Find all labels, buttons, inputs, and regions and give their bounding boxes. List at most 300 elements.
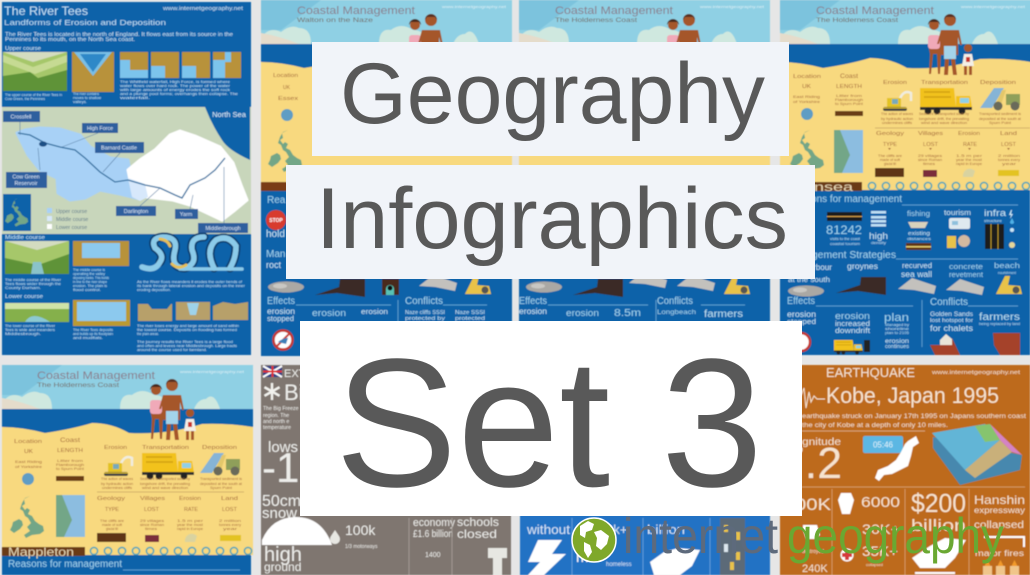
river title: The River Tees <box>4 4 88 18</box>
effects: plan to 2105 <box>885 331 909 335</box>
panel: Big Freeze extreme weather: EXTREME <box>284 368 337 380</box>
sand information graphics: Location <box>793 74 821 80</box>
sand information graphics: 2 million <box>219 519 241 523</box>
icon: no erosion sign <box>274 330 292 350</box>
river introduction <box>5 32 233 43</box>
map labels: Darlington <box>124 209 148 215</box>
panel: Earthquake Kobe, Japan 1995: 7.2 <box>780 439 842 488</box>
middle and lower course sections: the lowest course. Deposits on flooding has formed <box>137 328 237 332</box>
reasons for management: infra <box>984 208 1006 218</box>
panel: blue disaster infographic: billion <box>647 522 685 537</box>
title: Coastal Management <box>816 5 934 17</box>
effects and conflicts: erosion <box>267 307 295 316</box>
sand information graphics: wind and wave direction <box>921 121 967 125</box>
damage statistics: collapsed <box>866 562 883 567</box>
title: The Holderness Coast <box>37 382 119 389</box>
sand information graphics: Litter from <box>57 459 83 463</box>
title: Set 3: Set 3 <box>335 320 763 525</box>
clock: 05:46: 05:46 <box>873 440 894 450</box>
sand information graphics: 29 villages <box>918 154 942 158</box>
snow statistics: 1/3 motorways <box>345 544 378 550</box>
middle and lower course sections: the plain areas. <box>137 332 159 336</box>
reasons column: STOP <box>269 218 283 224</box>
weather description: region. The <box>263 413 289 419</box>
sand information graphics: Spurn Point <box>210 486 232 490</box>
middle and lower course sections: The River Tees deposits <box>73 328 113 332</box>
effects: erosion <box>885 339 909 345</box>
panel: blue disaster infographic: 0k+ <box>606 522 627 537</box>
effects and conflicts: Naze cliffs SSSI <box>405 310 445 316</box>
management strategies: nourishment <box>998 271 1016 275</box>
reasons for management: density <box>871 241 886 245</box>
sand information graphics: times <box>145 527 157 531</box>
sand information graphics: TYPE <box>105 507 119 513</box>
conflicts: Conflicts <box>930 297 968 308</box>
damage statistics: billion <box>911 516 966 535</box>
sand information graphics: year <box>1002 162 1018 166</box>
sand information graphics: Erosion <box>883 80 907 86</box>
middle and lower course sections <box>5 235 248 352</box>
effects and conflicts: protected by <box>405 316 446 322</box>
reasons column: Rea <box>267 195 286 206</box>
effects: increased <box>835 321 870 328</box>
middle and lower course sections: The journey results the River Tees is a large flood <box>137 340 233 344</box>
sand information graphics: Spurn Point <box>989 121 1011 125</box>
sand information graphics <box>10 438 244 542</box>
river introduction: Pennines to its mouth, on the North Sea coast. <box>5 37 135 43</box>
heading bar: Hornsea: Hornsea <box>785 180 853 194</box>
sand information graphics: The cliffs are <box>100 519 124 523</box>
management strategies: sea wall <box>901 270 932 279</box>
title: The Holderness Coast <box>816 17 898 24</box>
panel: Earthquake Kobe, Japan 1995: gnitude <box>802 437 842 448</box>
middle and lower course sections: The middle course is <box>73 268 105 272</box>
earthquake title: EARTHQUAKE <box>826 365 915 380</box>
sand information graphics: Transportation <box>142 445 189 451</box>
sand information graphics: The action of waves <box>101 477 133 481</box>
sand information graphics: Transportation <box>921 80 968 86</box>
reasons for management: structure <box>984 219 1002 223</box>
reasons for management: Reasons for management <box>788 194 902 205</box>
snow statistics: 100k <box>345 522 376 538</box>
panel: Coastal Management, Holderness Coast (right) <box>780 0 1030 355</box>
sand information graphics: Sediment is transported south by <box>919 112 969 116</box>
sand information graphics: Location <box>14 439 42 445</box>
sand information graphics: glacial till <box>106 527 118 531</box>
earthquake title: Kobe, Japan 1995 <box>826 383 999 408</box>
river introduction: The River Tees is located in the north of England. It flows east from its source in the <box>5 32 233 38</box>
middle and lower course sections: County Durham. <box>5 286 41 290</box>
middle and lower course sections: The river loses energy and large amount of sand within <box>137 324 239 328</box>
snow statistics: schools <box>457 515 499 529</box>
middle and lower course sections: in line to the river shape <box>73 280 107 284</box>
management strategies: concrete <box>949 264 983 271</box>
effects and conflicts: erosion <box>361 309 388 316</box>
upper course section: moves to shallow <box>73 96 101 100</box>
effects and conflicts: Effects <box>267 296 295 307</box>
title: www.internetgeography.net <box>442 5 507 9</box>
map labels: Barnard Castle <box>101 146 137 152</box>
river title <box>4 4 244 27</box>
sand information graphics: The cliffs are <box>878 154 902 158</box>
icon: Japan silhouette <box>875 436 919 481</box>
title: Coastal Management <box>555 5 673 17</box>
sand information graphics: Transported sediment is <box>979 112 1021 116</box>
effects and conflicts: stopped <box>267 316 294 323</box>
panel: Big Freeze extreme weather: Big <box>284 380 316 405</box>
effects and conflicts: erosion <box>312 308 346 318</box>
damage statistics <box>795 488 1025 575</box>
middle and lower course sections: and often and levees near Middlesbrough. Large tracts <box>137 344 237 348</box>
damage statistics: 00K <box>795 495 832 514</box>
damage statistics: major fires <box>975 549 1024 558</box>
reasons column: hold <box>266 229 285 240</box>
icon: union flag <box>263 366 282 377</box>
icon: road traffic <box>720 518 745 575</box>
sand information graphics: of Yorkshire <box>793 100 820 104</box>
sand information graphics: year the most <box>956 158 982 162</box>
sand information graphics: longshore drift, the prevailing <box>140 482 190 486</box>
map labels: Reservoir <box>14 181 38 187</box>
sand information graphics: East Riding <box>793 95 820 99</box>
sand information graphics: 2 million <box>998 154 1020 158</box>
sand information graphics: Deposition <box>202 445 237 451</box>
sand information graphics: Coast <box>840 74 858 80</box>
logo: internet geography <box>572 508 1004 564</box>
management strategies: groynes <box>847 262 878 271</box>
panel: Coastal Management, Holderness Coast (lower) <box>2 365 253 575</box>
sand information graphics: since Roman <box>918 158 942 162</box>
sand information graphics: Flamborough <box>835 98 863 102</box>
UK inset <box>3 194 31 231</box>
sand information graphics: The action of waves <box>881 112 913 116</box>
panel: blue disaster infographic: without <box>526 522 570 537</box>
effects and conflicts: Conflicts <box>657 296 693 307</box>
title: Coastal Management <box>37 370 155 382</box>
earthquake title <box>826 365 1021 408</box>
panel: blue disaster infographic: homeless <box>606 562 632 568</box>
upper course section: The Whitfield waterfall, High Force, is formed where <box>120 80 230 84</box>
reasons for management: 81242 <box>826 223 862 237</box>
sand information graphics: wind and wave direction <box>142 486 188 490</box>
map legend <box>47 208 88 231</box>
middle and lower course sections: As the River flows meanders it erodes the outer bends of <box>137 280 243 284</box>
upper course section: The river contains <box>73 92 99 96</box>
meanders <box>142 237 242 269</box>
sand information graphics: to Spurn Point <box>56 467 84 471</box>
middle and lower course sections: The lower course of the River <box>5 324 56 328</box>
damage statistics: 35K+ <box>862 543 898 559</box>
river title: Landforms of Erosion and Deposition <box>4 18 166 27</box>
snow statistics: £1.6 billion <box>413 529 453 540</box>
panel: Coastal Management, Holderness Coast (centre) <box>519 0 770 356</box>
sand information graphics: LOST <box>144 507 160 513</box>
upper course section: with large amounts of energy erodes the soft rock <box>120 88 230 92</box>
effects and conflicts: Longbeach <box>657 310 696 316</box>
management strategies: recurved <box>902 263 932 270</box>
panel: blue disaster infographic <box>520 365 770 575</box>
location column: UK <box>283 85 290 91</box>
weather description <box>263 406 299 431</box>
sand information graphics: of Yorkshire <box>15 465 42 469</box>
middle and lower course sections: flood control. <box>73 288 101 292</box>
reasons column: Man <box>266 249 285 260</box>
effects and conflicts: erosion <box>519 307 547 316</box>
sand information graphics: 29 villages <box>140 519 164 523</box>
reasons for management: visits to the coast <box>830 237 860 241</box>
earthquake description <box>802 413 1026 431</box>
title: www.internetgeography.net <box>700 5 765 9</box>
effects: plan <box>884 312 909 324</box>
reasons for management: fishing <box>907 211 930 218</box>
sand information graphics: year <box>223 527 239 531</box>
effects and conflicts: Effects <box>519 296 547 307</box>
reasons for management <box>788 194 1018 250</box>
map of the Tees basin: North Sea <box>212 110 247 119</box>
effects: downdrift <box>835 328 870 335</box>
damage statistics: 30K+ <box>862 521 900 537</box>
middle and lower course sections: erosion. The plain is <box>73 284 107 288</box>
weather description: and north e <box>263 419 289 425</box>
management strategies: revetment <box>949 272 983 279</box>
panel: Big Freeze extreme weather: snow <box>262 505 297 522</box>
sand information graphics <box>790 74 1030 177</box>
sand information graphics: Coast <box>60 438 80 444</box>
panel: Coastal Management, Walton on the Naze <box>261 0 512 356</box>
middle and lower course sections: Tees flows wider through the <box>5 282 61 286</box>
sand information graphics: made of soft <box>102 523 122 527</box>
sand information graphics: Erosion <box>104 445 127 451</box>
damage statistics: $200 <box>911 488 966 518</box>
title: Infographics: Infographics <box>316 171 788 267</box>
title: The Holderness Coast <box>555 17 637 24</box>
wordmark: internet: internet <box>623 508 778 564</box>
sand information graphics: UK <box>802 84 811 90</box>
middle and lower course sections: deposing banks. This builds <box>73 276 109 280</box>
sand information graphics: Deposition <box>980 80 1016 86</box>
conflicts: Golden Sands <box>930 312 973 318</box>
sand information graphics: Erosion <box>958 131 980 137</box>
panel: Big Freeze extreme weather: -19 <box>262 444 323 491</box>
effects: shoreline <box>885 327 909 331</box>
middle and lower course sections: Tees is wide and meanders <box>5 328 55 332</box>
clock: 05:46 <box>863 436 903 453</box>
sand information graphics: Villages <box>140 496 165 502</box>
middle and lower course sections: and builds up its floodplain <box>73 332 113 336</box>
effects and conflicts: erosion <box>566 308 599 318</box>
snow statistics: economy <box>413 517 455 529</box>
effects <box>787 296 913 355</box>
sand information graphics: Litter from <box>836 94 862 98</box>
title <box>555 5 765 24</box>
map labels: Yarm <box>180 212 193 218</box>
reasons column: roct <box>266 260 282 270</box>
sand information graphics: Erosion <box>179 496 201 502</box>
sand information graphics: deposited at the south at <box>200 482 242 486</box>
sand information graphics: since Roman <box>140 523 164 527</box>
upper course section: valleys. <box>73 100 87 104</box>
reasons for management: existing <box>908 231 930 237</box>
panel: The River Tees <box>2 2 251 355</box>
sand information graphics: by hydraulic action <box>881 117 913 121</box>
sand information graphics: rapid in Europe <box>956 162 982 166</box>
effects: stopped <box>787 319 816 326</box>
conflicts: farmers <box>979 312 1020 323</box>
heading bar: Mappleton <box>2 545 85 559</box>
conflicts: for chalets <box>930 324 973 333</box>
sand information graphics: LOST <box>1001 142 1017 148</box>
map labels: Middlesbrough <box>205 226 241 232</box>
effects: erosion <box>835 311 870 321</box>
middle and lower course sections: Lower course <box>5 294 43 300</box>
icon: snowflake <box>264 383 280 400</box>
upper course section: and a plunge pool forms; overhangs then collapse. The <box>120 92 238 96</box>
location column: Essex <box>278 96 298 102</box>
sand information graphics: Transported sediment is <box>200 477 242 481</box>
sand information graphics: Villages <box>918 131 943 137</box>
sand information graphics: TYPE <box>883 142 897 148</box>
sand information graphics: Geology <box>97 496 125 502</box>
snow statistics: 1400 <box>425 552 441 559</box>
effects and conflicts <box>519 296 745 356</box>
title: Walton on the Naze <box>297 17 373 24</box>
title <box>816 5 1026 24</box>
conflicts: being replaced by land <box>979 322 1020 326</box>
effects and conflicts: farmers <box>704 309 743 320</box>
upper course section: Cow Green, the Pennines <box>5 97 45 101</box>
snow statistics <box>330 515 507 575</box>
sand information graphics: made of soft <box>880 158 900 162</box>
middle and lower course sections: operating the valley <box>73 272 105 276</box>
sand information graphics: Flamborough <box>56 463 84 467</box>
middle and lower course sections: eroding deposition. <box>137 288 171 292</box>
middle and lower course sections: Middlesbrough. <box>5 332 41 336</box>
sand information graphics: East Riding <box>15 460 42 464</box>
title: Geography: Geography <box>340 46 765 142</box>
weather description: temperature <box>263 425 291 431</box>
sand information graphics: year the most <box>177 523 203 527</box>
sand information graphics: rapid in Europe <box>177 527 203 531</box>
reasons for management: distances <box>907 236 931 241</box>
panel: Big Freeze extreme weather: 50cm <box>262 493 301 510</box>
upper course section: The upper course of the River Tees in <box>5 93 62 97</box>
location column: Location <box>273 73 298 79</box>
effects: erosion <box>787 310 816 319</box>
middle and lower course sections: The middle course of the River <box>5 278 62 282</box>
damage statistics: 6000 <box>861 494 900 511</box>
management strategies: at the south <box>788 277 830 284</box>
sand information graphics: undermines cliffs <box>102 486 132 490</box>
panel: Big Freeze extreme weather: ground <box>264 560 301 574</box>
title <box>297 5 507 24</box>
wordmark: geography: geography <box>787 508 1004 564</box>
icon: snow mound <box>262 517 332 545</box>
upper course section: Upper course <box>5 46 41 52</box>
icon: globe <box>572 518 616 562</box>
sand information graphics: longshore drift, the prevailing <box>919 117 969 121</box>
river title: www.internetgeography.net <box>163 6 244 12</box>
panel: Big Freeze extreme weather: lows <box>268 439 298 456</box>
earthquake description: earthquake struck on January 17th 1995 on Japans southern coast <box>802 413 1026 420</box>
map labels: Crossfell <box>11 114 31 120</box>
sand information graphics: tonnes every <box>998 158 1020 162</box>
sand information graphics: to Spurn Point <box>835 102 863 106</box>
sand information graphics: Land <box>221 496 238 502</box>
reasons column <box>266 195 286 270</box>
groundwater tunnel icon <box>382 279 399 295</box>
sand information graphics: 1.5 m per <box>177 519 204 523</box>
map labels <box>3 111 248 233</box>
reasons for management: tourism <box>944 210 971 217</box>
effects and conflicts: Naze SSSI <box>455 310 485 316</box>
damage statistics: 240K <box>802 563 828 575</box>
sand information graphics: LOST <box>222 507 238 513</box>
title: www.internetgeography.net <box>961 5 1026 9</box>
sand information graphics: undermines cliffs <box>882 121 912 125</box>
reasons for management: high <box>869 231 888 241</box>
effects and conflicts: Conflicts <box>405 296 443 307</box>
map legend: Upper course <box>56 209 87 215</box>
sand information graphics: LENGTH <box>57 448 83 454</box>
effects: Managed by <box>885 323 909 327</box>
title: Coastal Management <box>297 5 415 17</box>
middle and lower course sections: around the course used for farmland. <box>137 348 207 352</box>
middle and lower course sections: Middle course <box>5 235 45 241</box>
earthquake description: the city of Kobe at a depth of only 10 miles. <box>802 422 948 429</box>
location column <box>268 73 302 172</box>
damage statistics: destroyed <box>802 549 824 555</box>
sand information graphics: glacial till <box>884 162 896 166</box>
heading bar: Hornsea <box>780 180 862 194</box>
sand information graphics: LENGTH <box>836 84 862 90</box>
sand information graphics: LOST <box>923 142 939 148</box>
icon: lightning bolt <box>528 540 566 575</box>
map of the Tees basin <box>3 107 250 233</box>
heading bar: Mappleton: Mappleton <box>8 545 74 559</box>
damage statistics: expressway <box>974 506 1025 515</box>
effects and conflicts: protected <box>455 316 485 322</box>
map labels: High Force <box>87 126 113 132</box>
snow statistics: closed <box>457 527 497 541</box>
sand information graphics: times <box>923 162 935 166</box>
sand information graphics: deposited at the south at <box>979 117 1021 121</box>
map legend: Lower course <box>56 225 87 231</box>
title: www.internetgeography.net <box>180 370 245 374</box>
conflicts <box>922 297 1020 355</box>
effects: Effects <box>787 296 815 307</box>
sand information graphics: 1.5 m per <box>956 154 983 158</box>
map legend: Middle course <box>56 217 88 223</box>
icon: damaged map <box>650 548 700 575</box>
upper course section: water flows over hard rock. The power of the water <box>120 84 231 88</box>
damage statistics: collapsed <box>974 520 1024 531</box>
panel: blue disaster infographic: m <box>576 549 588 566</box>
panel: Earthquake Kobe, Japan 1995 <box>780 365 1030 575</box>
effects and conflicts <box>267 296 487 356</box>
icon: seismograph trace <box>800 388 825 408</box>
panel: Big Freeze extreme weather <box>261 365 511 575</box>
sand information graphics: RATE <box>963 142 977 148</box>
3D tectonic map <box>932 424 1022 485</box>
earthquake title: www.internetgeography.net <box>931 370 1021 376</box>
reasons for management: coastal tourism <box>830 242 860 246</box>
reasons for management heading: Reasons for management <box>8 559 122 570</box>
middle and lower course sections: its bank through lateral erosion and deposits on the inner <box>137 284 246 288</box>
sand information graphics: Land <box>1000 131 1017 137</box>
sand information graphics: UK <box>24 449 33 455</box>
sand information graphics: RATE <box>184 507 198 513</box>
sand information graphics: Sediment is transported south by <box>140 477 190 481</box>
